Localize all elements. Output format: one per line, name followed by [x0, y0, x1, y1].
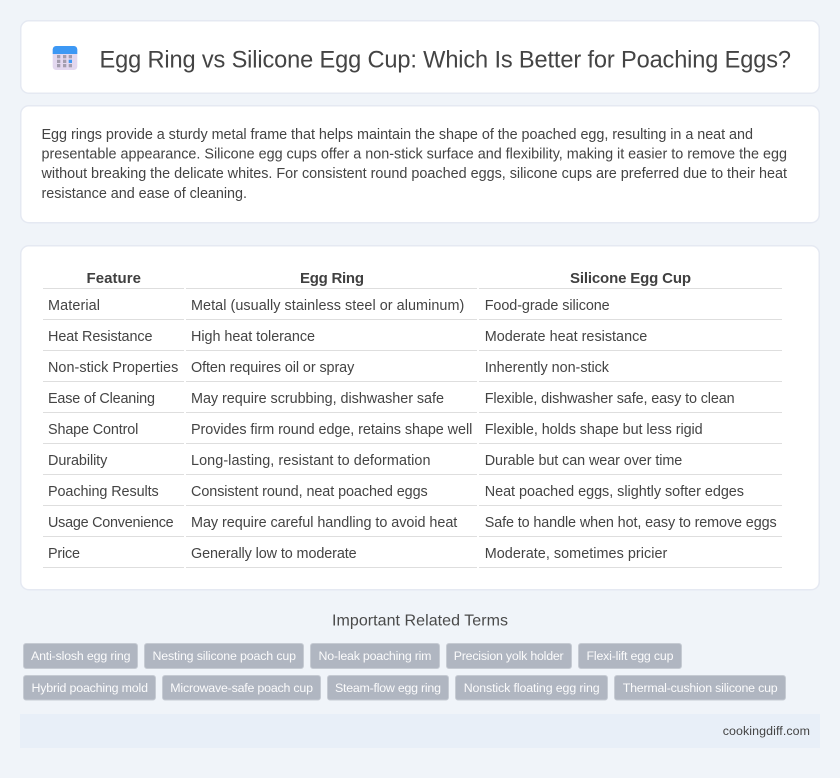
row: durability	[48, 453, 682, 469]
row: shape control: Provides firm round edge, retains shape well	[191, 422, 472, 438]
table header row	[86, 270, 691, 287]
row: material: Metal (usually stainless steel or aluminum)	[191, 298, 464, 314]
row: price: Price	[48, 546, 80, 562]
row: non-stick properties	[48, 360, 610, 376]
tag: Nesting silicone poach cup	[152, 649, 296, 663]
footer source text: cookingdiff.com	[723, 724, 810, 738]
row: durability: Durable but can wear over time	[485, 453, 682, 469]
row: non-stick properties: Inherently non-stick	[485, 360, 610, 376]
intro paragraph: Egg rings provide a sturdy metal frame that helps maintain the shape of the poached egg, resulting in a neat and	[42, 127, 753, 143]
panel: related term tags	[24, 644, 786, 700]
tag	[144, 644, 304, 668]
tag	[162, 676, 320, 700]
row: material: Food-grade silicone	[485, 298, 610, 314]
tag	[24, 676, 156, 700]
row: ease of cleaning: May require scrubbing, dishwasher safe	[191, 391, 444, 407]
tag: Flexi-lift egg cup	[586, 649, 674, 663]
heading: important related terms: Important Related Terms	[332, 613, 508, 630]
intro paragraph	[40, 127, 787, 202]
row: shape control	[48, 422, 703, 438]
row: shape control: Shape Control	[48, 422, 138, 438]
table header row: Silicone Egg Cup	[570, 270, 691, 287]
row: poaching results	[48, 484, 744, 500]
tag: Precision yolk holder	[454, 649, 564, 663]
footer	[20, 714, 820, 748]
tag: Anti-slosh egg ring	[31, 649, 131, 663]
tag: Microwave-safe poach cup	[170, 681, 313, 695]
row: durability: Durability	[48, 453, 108, 469]
row: durability: Long-lasting, resistant to deformation	[191, 453, 430, 469]
row: ease of cleaning: Flexible, dishwasher safe, easy to clean	[485, 391, 735, 407]
row: usage convenience: May require careful handling to avoid heat	[191, 515, 457, 531]
panel: intro text	[21, 106, 819, 223]
icon: calendar	[53, 46, 77, 70]
row: ease of cleaning: Ease of Cleaning	[48, 391, 155, 407]
row: price: Generally low to moderate	[191, 546, 357, 562]
intro paragraph: resistance and ease of cleaning.	[42, 186, 247, 202]
tag	[446, 644, 572, 668]
row: heat resistance	[48, 329, 647, 345]
row: heat resistance: Moderate heat resistance	[485, 329, 647, 345]
tag	[310, 644, 440, 668]
panel: comparison table	[21, 246, 819, 590]
row: non-stick properties: Often requires oil or spray	[191, 360, 355, 376]
row: price	[48, 546, 668, 562]
tag: Thermal-cushion silicone cup	[623, 681, 778, 695]
tag	[456, 676, 608, 700]
row: poaching results: Consistent round, neat poached eggs	[191, 484, 428, 500]
row: heat resistance: High heat tolerance	[191, 329, 315, 345]
tag	[328, 676, 448, 700]
tag: Nonstick floating egg ring	[464, 681, 600, 695]
row: ease of cleaning	[48, 391, 735, 407]
panel: header	[21, 21, 819, 93]
row: non-stick properties: Non-stick Properties	[48, 360, 178, 376]
tag	[24, 644, 138, 668]
tag: Hybrid poaching mold	[32, 681, 148, 695]
row: poaching results: Neat poached eggs, slightly softer edges	[485, 484, 744, 500]
row: usage convenience: Safe to handle when hot, easy to remove eggs	[485, 515, 777, 531]
table row lines	[43, 288, 782, 568]
row: price: Moderate, sometimes pricier	[485, 546, 668, 562]
row: heat resistance: Heat Resistance	[48, 329, 152, 345]
row: material	[48, 298, 610, 314]
tag	[578, 644, 682, 668]
tag	[614, 676, 786, 700]
title: Egg Ring vs Silicone Egg Cup: Which Is Better for Poaching Eggs?	[100, 48, 791, 74]
tag: Steam-flow egg ring	[335, 681, 441, 695]
tag: No-leak poaching rim	[318, 649, 432, 663]
row: usage convenience	[48, 515, 777, 531]
table header row: Feature	[86, 270, 141, 287]
row: usage convenience: Usage Convenience	[48, 515, 174, 531]
intro paragraph: presentable appearance. Silicone egg cups offer a non-stick surface and flexibility, making it easier to remove the egg	[42, 147, 787, 163]
table header row: Egg Ring	[300, 270, 364, 287]
row: material: Material	[48, 298, 100, 314]
row: shape control: Flexible, holds shape but less rigid	[485, 422, 703, 438]
intro paragraph: without breaking the delicate whites. For consistent round poached eggs, silicone cups are preferred due to their heat	[40, 166, 787, 182]
row: poaching results: Poaching Results	[48, 484, 159, 500]
